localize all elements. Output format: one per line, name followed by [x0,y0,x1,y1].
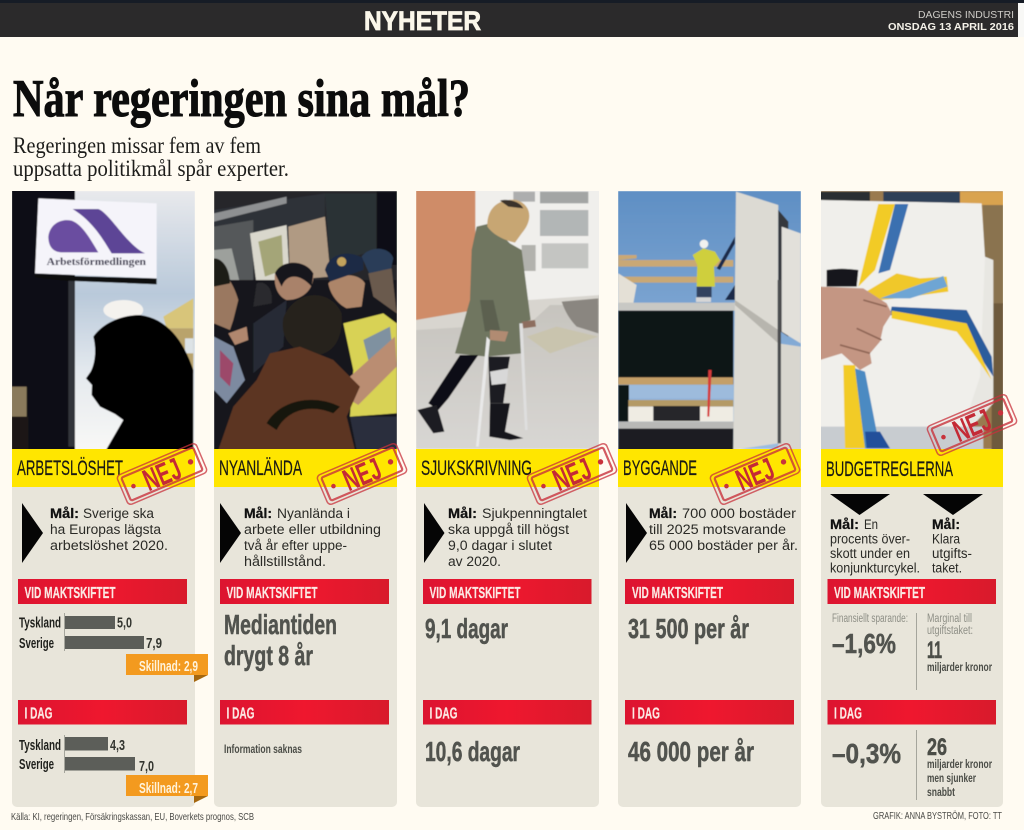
callout: skillnad 2,9: Skillnad: 2,9 [139,659,198,675]
goal text [649,506,798,553]
goal text: Mål: [50,506,79,521]
stamp: nej, byggande: NEJ [731,451,780,498]
bar chart: vid maktskiftet: 5,0 [117,616,132,632]
source note: Källa: KI, regeringen, Försäkringskassan, EU, Boverkets prognos, SCB [11,811,254,823]
stamp: nej, nyanlända: NEJ [338,451,387,498]
left goal text: konjunkturcykel. [830,560,920,576]
stamp: nej, budgetreglerna: NEJ [948,402,997,449]
body card [416,487,599,807]
stat: marginal then [927,613,992,674]
subtitle [13,133,289,181]
red label: vid maktskiftet: VID MAKTSKIFTET [632,585,723,602]
callout: skillnad 2,7 [126,775,208,803]
red label: vid maktskiftet: VID MAKTSKIFTET [24,585,116,602]
red label: i dag: I DAG [24,706,52,722]
value: 46 000 per år: 46 000 per år [628,736,754,767]
bar chart: i dag [19,735,154,775]
heading: NYANLÄNDA [219,457,302,480]
photo: migrants and police at train [214,191,397,450]
stat: marginal then: miljarder kronor [927,662,992,674]
photo: Arbetsförmedlingen sign and silhouette [12,190,195,450]
stamp: nej, nyanlända [316,442,409,507]
goal text: Mål: [244,506,272,521]
icon: left goal arrow [830,494,890,515]
bar chart: i dag: Sverige [19,757,54,773]
goal text: arbete eller utbildning [244,522,381,537]
goal text: två år efter uppe- [244,538,347,553]
right goal text: Klara [932,532,960,546]
note: information saknas: Information saknas [224,744,302,756]
red label: i dag: I DAG [632,706,660,722]
goal text: Mål: [649,506,677,521]
goal text: hållstillstånd. [244,554,326,569]
red label: i dag [423,700,592,724]
stat: finansiellt sparande now: –0,3% [832,738,901,769]
stamp: nej, budgetreglerna [926,393,1019,458]
goal text: till 2025 motsvarande [649,522,786,537]
left goal text: procents över- [830,532,910,546]
callout: skillnad 2,7: Skillnad: 2,7 [139,781,198,797]
goal text [244,506,381,569]
subtitle: Regeringen missar fem av fem [13,133,261,158]
goal text: Mål: [448,506,477,521]
goal text: ska uppgå till högst [448,522,569,537]
panel: byggande [618,191,801,807]
heading: ARBETSLÖSHET [17,457,123,480]
value: 9,1 dagar: 9,1 dagar [425,613,508,644]
right goal text: utgifts- [932,546,972,561]
red label: i dag: I DAG [834,706,862,722]
value: mediantiden: Mediantiden [224,609,337,640]
newspaper name: DAGENS INDUSTRI [918,9,1014,21]
red label: vid maktskiftet: VID MAKTSKIFTET [834,585,925,602]
icon: goal arrow [220,503,241,563]
icon: goal arrow [424,503,444,563]
panel: arbetslöshet [12,190,208,807]
stat: marginal now: snabbt [927,787,955,799]
red label: i dag: I DAG [430,706,458,722]
stat: marginal now [927,734,992,799]
bar chart: i dag: 7,0 [139,759,154,775]
red label: vid maktskiftet [625,579,794,604]
left goal text: skott under en [830,546,910,561]
photo: construction site [618,191,801,450]
bar chart: vid maktskiftet [19,613,162,652]
left goal text: Mål: [830,517,859,532]
red label: i dag: I DAG [226,706,254,722]
red label: i dag [625,700,794,724]
stat: marginal then: utgiftstaket: [927,625,973,637]
bar chart: i dag: Tyskland [19,738,61,754]
stat: finansiellt sparande then: –1,6% [832,628,896,659]
red label: vid maktskiftet [18,579,187,604]
red label: i dag [220,700,389,724]
yellow heading band [12,449,195,487]
panel: nyanlända [214,191,397,807]
heading: BYGGANDE [623,457,697,480]
stat: marginal then: Marginal till [927,613,972,625]
icon: goal arrow [22,503,43,563]
red label: i dag [18,700,187,724]
right goal text [932,517,972,576]
goal text: 65 000 bostäder per år. [649,538,798,553]
red label: vid maktskiftet: VID MAKTSKIFTET [226,585,318,602]
icon: goal arrow [626,503,647,563]
bar chart: vid maktskiftet: 7,9 [146,636,162,652]
stat: marginal now: men sjunker [927,773,976,785]
title: Når regeringen sina mål? [13,70,470,128]
photo: woman on crutches [416,190,600,449]
left goal text [830,517,920,576]
stamp: nej, sjukskrivning [526,442,619,507]
newspaper header band [0,0,1024,37]
body card [618,487,801,807]
goal text: ha Europas lägsta [50,522,161,537]
body card [214,487,397,807]
goal text: Nyanlända i [277,506,350,521]
photo: budget documents with ribbon [820,191,1003,450]
red label: vid maktskiftet [220,579,389,604]
right goal text: taket. [932,560,962,576]
goal text: Sjukpenningtalet [482,506,587,521]
red label: vid maktskiftet [423,579,592,604]
heading: BUDGETREGLERNA [826,458,953,481]
stamp: nej, byggande [709,442,802,507]
section name: NYHETER [364,6,481,36]
stamp: nej, arbetslöshet: NEJ [138,451,187,498]
bar chart: i dag: 4,3 [110,738,125,754]
stat: marginal now: miljarder kronor [927,759,992,771]
subtitle: uppsatta politikmål spår experter. [13,156,289,181]
stamp: nej, arbetslöshet [116,442,209,507]
yellow heading band [821,449,1003,487]
stat: finansiellt sparande then [832,613,908,659]
yellow heading band [214,449,397,487]
goal text: av 2020. [448,554,501,569]
yellow heading band [618,449,801,487]
goal text: arbetslöshet 2020. [50,538,168,553]
stamp: nej, sjukskrivning: NEJ [548,451,597,498]
callout: skillnad 2,9 [126,654,208,682]
body card [821,487,1003,807]
red label: vid maktskiftet: VID MAKTSKIFTET [430,585,521,602]
goal text: Sverige ska [83,506,154,521]
value: mediantiden: drygt 8 år [224,640,313,671]
panel: budgetreglerna [820,191,1003,807]
heading: SJUKSKRIVNING [421,457,532,480]
goal text: 700 000 bostäder [682,506,797,521]
bar chart: vid maktskiftet: Tyskland [19,616,61,632]
panel: sjukskrivning [416,190,600,807]
sign text: Arbetsförmedlingen [47,256,146,268]
goal text: 9,0 dagar i slutet [448,538,552,553]
bar chart: vid maktskiftet: Sverige [19,636,54,652]
left goal text: En [864,517,878,532]
right goal text: Mål: [932,517,960,532]
goal text [50,506,168,553]
red label: i dag [828,700,996,724]
stat: marginal then: 11 [927,637,942,664]
body card [12,487,195,807]
stat: marginal now: 26 [927,734,947,761]
yellow heading band [416,449,599,487]
red label: vid maktskiftet [828,579,996,604]
stat: finansiellt sparande then: Finansiellt sparande: [832,613,908,625]
date: ONSDAG 13 APRIL 2016 [888,21,1014,33]
icon: right goal arrow [923,494,983,515]
value: mediantiden [224,609,337,671]
value: 31 500 per år: 31 500 per år [628,613,749,644]
goal text [448,506,587,569]
value: 10,6 dagar: 10,6 dagar [425,736,520,767]
